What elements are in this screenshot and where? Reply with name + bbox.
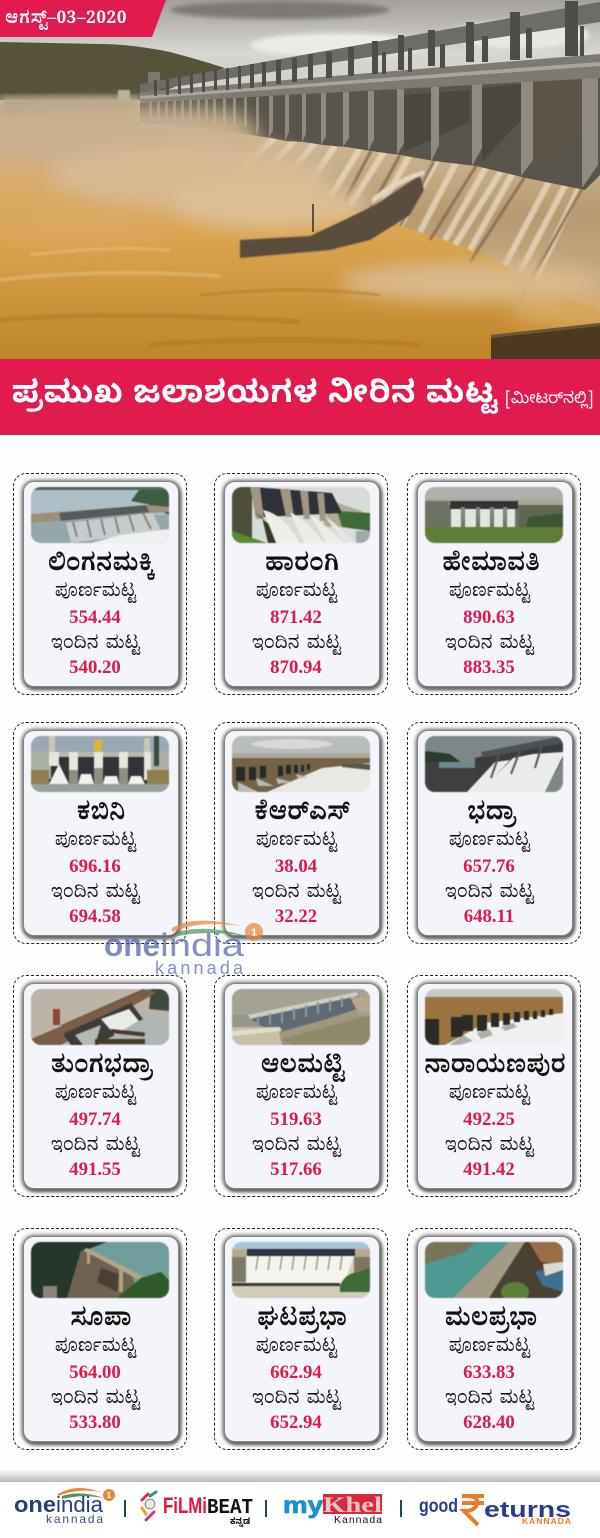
hero photo: dam spillway with muddy water	[0, 0, 600, 359]
photo: Narayanapura dam	[424, 988, 564, 1046]
foreground wall	[491, 323, 600, 360]
today level value: 491.55	[69, 1159, 121, 1180]
logo: goodreturns kannada	[419, 1494, 571, 1526]
reservoir name: ಹೇಮಾವತಿ	[442, 549, 540, 588]
full level value: 633.83	[463, 1362, 515, 1383]
logo: goodreturns kannada: eturns	[484, 1497, 571, 1522]
today level label: ಇಂದಿನ ಮಟ್ಟ	[252, 633, 340, 661]
logo: oneindia kannada: 1	[107, 1491, 112, 1500]
full level label: ಪೂರ್ಣಮಟ್ಟ	[256, 1083, 336, 1111]
full level value: 871.42	[270, 607, 322, 628]
panel: Tungabhadra	[13, 975, 187, 1197]
watermark: oneindia kannada: one	[104, 927, 160, 963]
reservoir name: ತುಂಗಭದ್ರಾ	[51, 1051, 151, 1090]
today level label: ಇಂದಿನ ಮಟ್ಟ	[445, 633, 533, 661]
today level label: ಇಂದಿನ ಮಟ್ಟ	[252, 1388, 340, 1416]
today level value: 648.11	[464, 906, 514, 927]
today level label: ಇಂದಿನ ಮಟ್ಟ	[252, 1135, 340, 1163]
reservoir name: ನಾರಾಯಣಪುರ	[424, 1051, 566, 1090]
full level value: 564.00	[69, 1362, 121, 1383]
today level value: 540.20	[69, 657, 121, 678]
full level label: ಪೂರ್ಣಮಟ್ಟ	[256, 830, 336, 858]
photo: Tungabhadra dam	[30, 988, 170, 1046]
logo: mykhel kannada	[283, 1494, 382, 1526]
reservoir name: ಆಲಮಟ್ಟಿ	[261, 1051, 343, 1090]
bridge upper	[140, 2, 600, 92]
reservoir name: ಮಲಪ್ರಭಾ	[445, 1304, 537, 1343]
full level value: 492.25	[463, 1109, 515, 1130]
photo: Hemavathi dam	[424, 486, 564, 544]
logo: filmibeat	[140, 1490, 253, 1529]
divider mark 3	[400, 1500, 402, 1517]
watermark: oneindia kannada: 1	[251, 927, 257, 939]
watermark: oneindia kannada: kannada	[155, 958, 244, 978]
logo: filmibeat: BEAT	[207, 1497, 253, 1520]
logo: goodreturns kannada: KANNADA	[522, 1516, 571, 1526]
today level value: 491.42	[463, 1159, 515, 1180]
panel: Ghataprabha	[214, 1228, 388, 1450]
reservoir name: ಕೆಆರ್‌ಎಸ್	[254, 798, 350, 837]
logo: oneindia kannada: india	[56, 1492, 104, 1517]
today level label: ಇಂದಿನ ಮಟ್ಟ	[51, 1388, 139, 1416]
full level value: 696.16	[69, 856, 121, 877]
today level label: ಇಂದಿನ ಮಟ್ಟ	[445, 882, 533, 910]
rock island	[240, 170, 425, 258]
spillway faces	[140, 70, 600, 312]
logo: goodreturns kannada: good	[419, 1496, 458, 1517]
full level value: 554.44	[69, 607, 121, 628]
panel: Malaprabha	[407, 1228, 581, 1450]
reservoir name: ಘಟಪ್ರಭಾ	[257, 1304, 347, 1343]
reservoir name: ಸೂಪಾ	[70, 1304, 132, 1343]
photo: Harangi dam	[231, 486, 371, 544]
today level value: 694.58	[69, 906, 121, 927]
photo: Ghataprabha dam	[231, 1242, 371, 1298]
full level label: ಪೂರ್ಣಮಟ್ಟ	[449, 1083, 529, 1111]
photo: Linganamakki dam	[30, 486, 170, 544]
logo: filmibeat: ಕನ್ನಡ	[230, 1517, 250, 1529]
water ripples	[0, 248, 420, 345]
logo: oneindia kannada: kannada	[46, 1512, 103, 1526]
full level value: 890.63	[463, 607, 515, 628]
reservoir name: ಕಬಿನಿ	[77, 798, 125, 837]
full level value: 38.04	[275, 856, 317, 877]
date text: ಆಗಸ್ಟ್–03–2020	[5, 9, 127, 36]
title banner	[0, 359, 600, 435]
full level label: ಪೂರ್ಣಮಟ್ಟ	[55, 581, 135, 609]
full level label: ಪೂರ್ಣಮಟ್ಟ	[256, 581, 336, 609]
photo: KRS dam	[231, 736, 371, 793]
photo: Almatti dam	[231, 988, 371, 1046]
today level label: ಇಂದಿನ ಮಟ್ಟ	[51, 633, 139, 661]
dark gate openings between piers	[140, 74, 600, 190]
divider mark 2	[265, 1500, 267, 1517]
photo: Kabini dam	[30, 735, 170, 793]
full level value: 657.76	[463, 856, 515, 877]
unit note: [ಮೀಟರ್‌ನಲ್ಲಿ]	[505, 391, 593, 412]
photo: Supa dam	[30, 1241, 170, 1299]
watermark: oneindia kannada	[104, 920, 263, 978]
panel: Supa	[13, 1228, 187, 1450]
full level label: ಪೂರ್ಣಮಟ್ಟ	[55, 1083, 135, 1111]
today level value: 883.35	[463, 657, 515, 678]
photo: Malaprabha dam	[424, 1241, 564, 1299]
logo: oneindia kannada	[14, 1488, 115, 1526]
panel: Bhadra	[407, 722, 581, 944]
full level label: ಪೂರ್ಣಮಟ್ಟ	[449, 830, 529, 858]
date tag	[0, 0, 166, 37]
reservoir name: ಹಾರಂಗಿ	[265, 549, 339, 588]
today level value: 870.94	[270, 657, 322, 678]
today level label: ಇಂದಿನ ಮಟ್ಟ	[252, 882, 340, 910]
full level label: ಪೂರ್ಣಮಟ್ಟ	[449, 581, 529, 609]
today level value: 32.22	[275, 906, 317, 927]
reservoir name: ಲಿಂಗನಮಕ್ಕಿ	[48, 549, 154, 588]
main heading: ಪ್ರಮುಖ ಜಲಾಶಯಗಳ ನೀರಿನ ಮಟ್ಟ	[12, 377, 499, 419]
full level value: 662.94	[270, 1362, 322, 1383]
panel: Hemavathi	[407, 473, 581, 695]
panel: Kabini	[13, 722, 187, 944]
bridge deck	[140, 54, 600, 103]
today level value: 628.40	[463, 1412, 515, 1433]
logo: mykhel kannada: Kannada	[334, 1514, 382, 1526]
full level value: 519.63	[270, 1109, 322, 1130]
photo: Bhadra dam	[424, 735, 564, 793]
footer shadow band	[0, 1470, 600, 1482]
footer	[0, 1470, 600, 1538]
panel: Almatti	[214, 975, 388, 1197]
full level label: ಪೂರ್ಣಮಟ್ಟ	[55, 830, 135, 858]
watermark: oneindia kannada: india	[160, 927, 244, 963]
mist	[0, 105, 600, 328]
full level label: ಪೂರ್ಣಮಟ್ಟ	[55, 1336, 135, 1364]
today level value: 533.80	[69, 1412, 121, 1433]
today level label: ಇಂದಿನ ಮಟ್ಟ	[445, 1135, 533, 1163]
full level label: ಪೂರ್ಣಮಟ್ಟ	[256, 1336, 336, 1364]
logo: oneindia kannada: one	[14, 1492, 56, 1517]
today level label: ಇಂದಿನ ಮಟ್ಟ	[51, 1135, 139, 1163]
divider mark 1	[124, 1500, 126, 1517]
panel: KRS	[214, 722, 388, 944]
full level value: 497.74	[69, 1109, 121, 1130]
today level label: ಇಂದಿನ ಮಟ್ಟ	[445, 1388, 533, 1416]
today level label: ಇಂದಿನ ಮಟ್ಟ	[51, 882, 139, 910]
panel: Narayanapura	[407, 975, 581, 1197]
today level value: 652.94	[270, 1412, 322, 1433]
today level value: 517.66	[270, 1159, 322, 1180]
logo: filmibeat: FiLMi	[163, 1493, 207, 1518]
panel: Linganamakki	[13, 473, 187, 695]
reservoir name: ಭದ್ರಾ	[467, 798, 515, 837]
panel: Harangi	[214, 473, 388, 695]
full level label: ಪೂರ್ಣಮಟ್ಟ	[449, 1336, 529, 1364]
piers	[149, 78, 598, 188]
